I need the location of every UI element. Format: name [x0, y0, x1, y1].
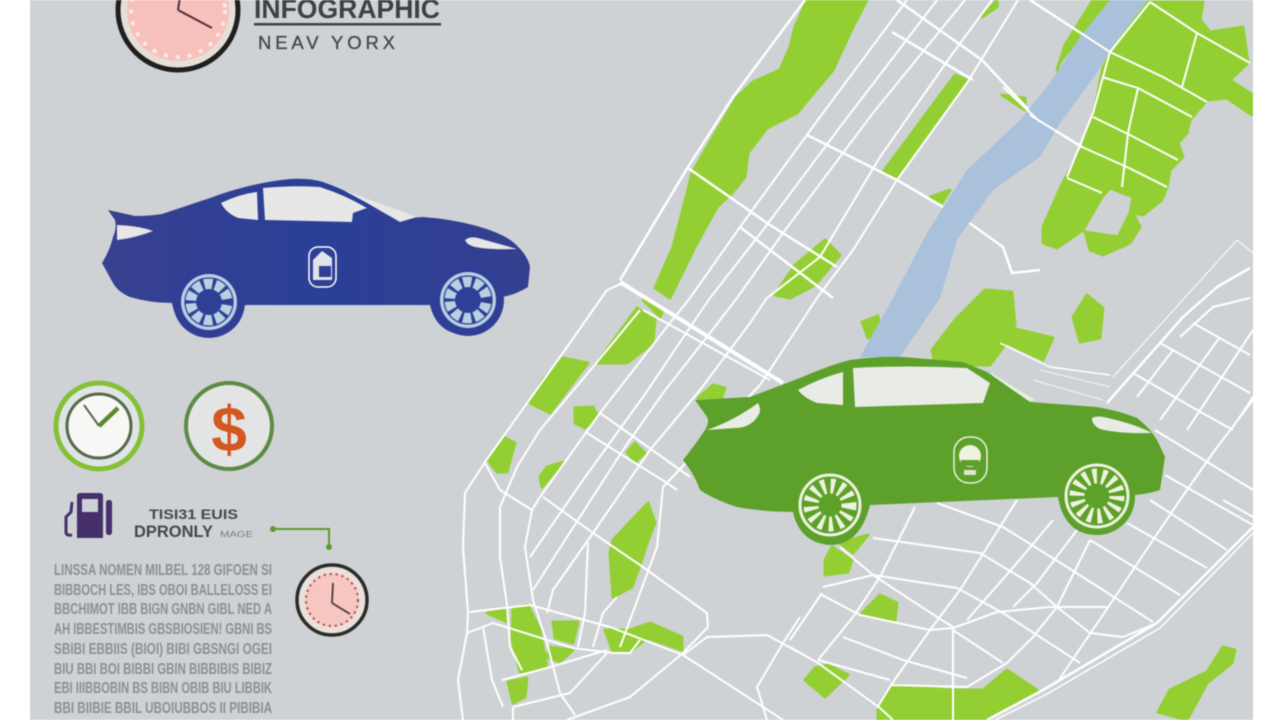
left margin: [0, 0, 30, 720]
map streets: [458, 0, 1253, 720]
right margin: [1253, 0, 1280, 720]
car wheels: [173, 264, 504, 338]
park paths: [1067, 2, 1250, 193]
river: [860, 0, 1147, 357]
icon: small clock: [297, 565, 367, 635]
car windows: [707, 366, 1152, 433]
body text: EBI IIIBBOBIN BS BIBN OBIB BIU LIBBIK: [54, 680, 272, 697]
fuel heading: TISI31 EUIS: [149, 506, 238, 522]
river crossing streets: [897, 0, 1110, 207]
body text: [54, 562, 272, 717]
map: [458, 0, 1253, 720]
fuel heading: [134, 506, 253, 541]
body text: BBCHIMOT IBB BIGN GNBN GIBL NED A: [54, 601, 272, 618]
icon: dollar: [186, 383, 272, 469]
icon: dollar: $: [211, 393, 247, 465]
body text: AH IBBESTIMBIS GBSBIOSIEN! GBNI BS: [54, 621, 272, 638]
car badge: [954, 437, 987, 483]
icon: fuel pump: [66, 493, 112, 538]
subtitle: NEAV YORX: [258, 32, 395, 53]
icon: top clock: [118, 0, 238, 70]
fuel heading: MAGE: [220, 530, 253, 539]
icon: green clock: [56, 383, 142, 469]
windshield sliver: [990, 372, 1035, 403]
car badge: [309, 247, 336, 287]
body text: SBIBI EBBIIS (BIOI) BIBI GBSNGI OGEI: [54, 641, 272, 658]
body text: LINSSA NOMEN MILBEL 128 GIFOEN SI: [54, 562, 272, 579]
fuel heading: DPRONLY: [134, 522, 214, 541]
blue car: [102, 179, 530, 338]
title rule: [254, 23, 441, 26]
car windows: [117, 186, 517, 249]
body text: BIU BBI BOI BIBBI GBIN BIBBIBIS BIBIZ: [54, 661, 272, 678]
connector arrow: [270, 526, 332, 550]
car wheels: [793, 459, 1135, 544]
body text: BIBBOCH LES, IBS OBOI BALLELOSS EI: [54, 582, 272, 599]
map parks: [487, 0, 1253, 720]
car body: [102, 179, 530, 337]
green car: [683, 357, 1165, 545]
title: [254, 0, 441, 53]
body text: BBI BIIBIE BBIL UBOIUBBOS II PIBIBIA: [54, 700, 272, 717]
car body: [683, 357, 1165, 545]
